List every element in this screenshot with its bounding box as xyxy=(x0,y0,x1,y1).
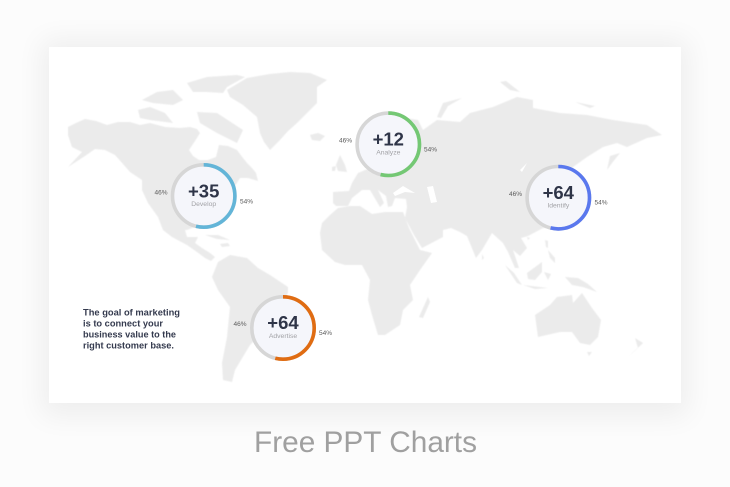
text block: marketing goal: is to connect your xyxy=(83,318,163,330)
donut: Identify: Identify xyxy=(547,202,570,210)
world map xyxy=(68,72,662,382)
donut: Identify: +64 xyxy=(543,182,575,203)
donut: Advertise: +64 xyxy=(267,312,299,333)
text block: marketing goal: The goal of marketing xyxy=(83,308,180,318)
map: Tasmania and New Zealand xyxy=(587,338,643,362)
donut: Advertise xyxy=(233,297,332,359)
map: Arctic islands xyxy=(138,75,245,149)
donut: Develop xyxy=(154,165,253,227)
donut: Analyze: Analyze xyxy=(376,150,401,156)
donut: Analyze: 54% xyxy=(424,146,437,154)
donut: Identify: 46% xyxy=(509,191,522,198)
donut: Develop: 54% xyxy=(240,198,253,206)
map: Madagascar xyxy=(419,297,430,318)
map: North and Central America xyxy=(68,119,258,261)
panel: white slide xyxy=(49,47,681,403)
map: South East Asia islands xyxy=(482,237,597,292)
donut: Analyze xyxy=(339,113,437,176)
map: Iceland and UK xyxy=(310,133,347,172)
text block: marketing goal: right customer base. xyxy=(83,340,174,352)
donut: Identify: 54% xyxy=(594,200,608,206)
donut: Develop: 46% xyxy=(154,190,168,196)
map: inland seas xyxy=(393,163,527,203)
map: South America xyxy=(212,255,288,382)
map: Eurasia xyxy=(333,97,662,268)
map: Africa xyxy=(320,206,432,335)
donut: Advertise: 54% xyxy=(319,330,332,337)
donut: Develop: +35 xyxy=(188,180,219,202)
footer title: Free PPT Charts xyxy=(254,426,477,459)
map: Arctic Russia islands xyxy=(437,81,620,170)
donut: Advertise: Advertise xyxy=(269,333,297,340)
map: Australia xyxy=(535,293,601,345)
map: Greenland xyxy=(227,72,327,150)
map: Caribbean islands xyxy=(205,235,230,247)
donut: Analyze: 46% xyxy=(339,138,352,144)
donut: Identify xyxy=(509,166,608,229)
donut: Advertise: 46% xyxy=(233,321,247,328)
donut: Develop: Develop xyxy=(191,201,216,208)
donut: Analyze: +12 xyxy=(373,128,404,150)
text block: marketing goal: business value to the xyxy=(83,330,176,340)
text block: marketing goal xyxy=(83,308,180,352)
